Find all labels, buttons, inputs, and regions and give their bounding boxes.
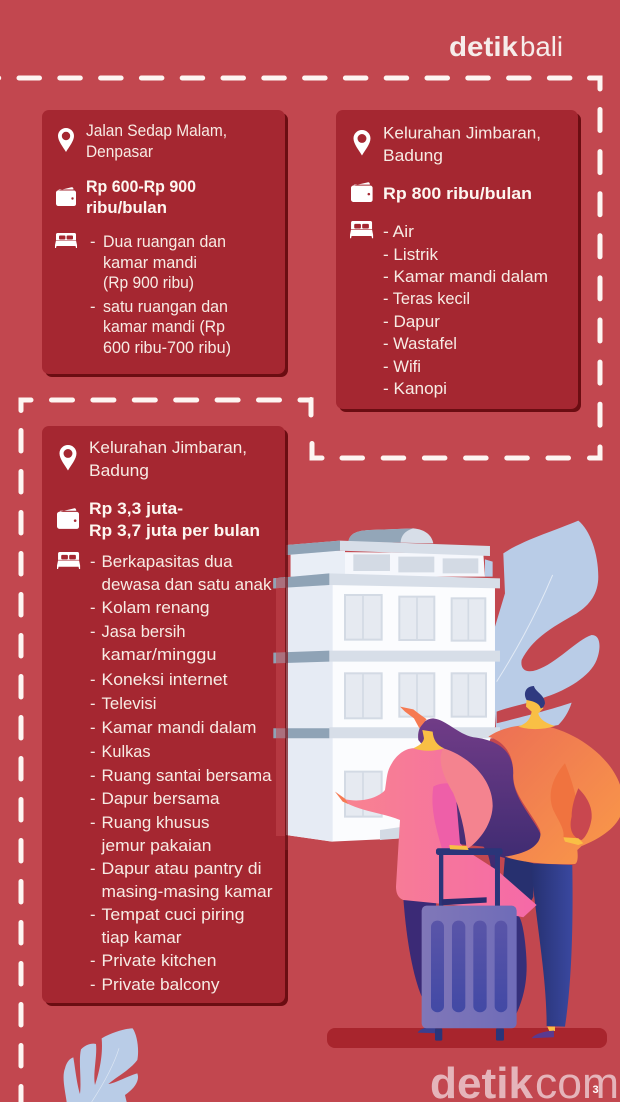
icon: wallet	[57, 508, 79, 529]
page number: 3	[592, 1084, 599, 1096]
dome	[348, 528, 433, 543]
facilities list: Koneksi internet	[102, 671, 228, 689]
card 3: text and icons	[57, 438, 273, 994]
facilities list: Ruang santai bersama	[102, 767, 272, 785]
price text	[89, 499, 260, 540]
icon: bed	[55, 233, 77, 248]
price text: Rp 800 ribu/bulan	[383, 184, 532, 203]
facilities list: -	[90, 623, 96, 641]
facilities list: kamar/minggu	[102, 646, 216, 664]
woman: hair	[418, 718, 543, 873]
facilities list: jemur pakaian	[100, 837, 212, 855]
location text: Kelurahan Jimbaran,	[89, 438, 247, 457]
facilities list: - Listrik	[383, 245, 438, 264]
facilities list: - Dapur	[383, 312, 440, 331]
woman: body	[335, 748, 537, 917]
facilities list: satu ruangan dan	[103, 298, 228, 316]
floor shadow	[327, 1028, 607, 1048]
facilities list: kamar mandi	[103, 254, 197, 272]
facilities list: tiap kamar	[102, 929, 182, 947]
woman: right arm	[441, 748, 493, 849]
location text	[89, 438, 247, 480]
facilities list: - Air	[383, 222, 414, 241]
icon: bed	[57, 552, 80, 569]
facilities list: 600 ribu-700 ribu)	[103, 339, 231, 357]
main body	[286, 585, 495, 842]
man: head and neck	[518, 686, 555, 729]
facilities list: Kulkas	[102, 743, 150, 761]
facilities list: -	[90, 952, 96, 970]
facilities list	[90, 553, 273, 994]
dashed frame: top right	[0, 78, 600, 458]
facilities list: -	[90, 767, 96, 785]
logo: detikbali: bali	[520, 31, 563, 62]
facilities list: -	[90, 790, 96, 808]
facilities list: -	[90, 976, 96, 994]
man: legs	[503, 857, 573, 1038]
suitcase	[422, 906, 517, 1041]
facilities list: dewasa dan satu anak	[102, 576, 272, 594]
facilities list: -	[90, 599, 96, 617]
logo: detikcom watermark	[430, 1059, 619, 1102]
icon: location pin	[60, 445, 76, 470]
facilities list: Dapur bersama	[102, 790, 220, 808]
dashed frame: lower left	[21, 400, 311, 1102]
icon: wallet	[56, 187, 76, 206]
location text: Kelurahan Jimbaran,	[383, 124, 541, 142]
location text	[383, 124, 541, 165]
facilities list: -	[90, 553, 96, 571]
man: torso	[488, 725, 620, 864]
facilities list: Kolam renang	[102, 599, 210, 617]
facilities list: Jasa bersih	[102, 623, 186, 641]
facilities list: -	[90, 743, 96, 761]
card 1: Jalan Sedap Malam	[42, 110, 288, 377]
facilities list: Televisi	[102, 695, 156, 713]
location text: Badung	[89, 461, 149, 480]
facilities list: - Kanopi	[383, 379, 447, 398]
card 3 shadow edge	[285, 530, 288, 850]
facilities list	[383, 222, 548, 398]
location text: Badung	[383, 146, 443, 165]
logo: detikbali	[449, 31, 563, 62]
facilities list	[90, 233, 231, 357]
facilities list: - Kamar mandi dalam	[383, 267, 548, 286]
facilities list: Private balcony	[102, 976, 220, 994]
woman: pointing arm	[400, 707, 427, 728]
facilities list: masing-masing kamar	[102, 883, 273, 901]
icon: bed	[350, 221, 373, 238]
icon: location pin	[354, 130, 370, 155]
facilities list: -	[90, 671, 96, 689]
icon: location pin	[58, 128, 74, 152]
facilities list: Kamar mandi dalam	[102, 719, 256, 737]
logo: detikbali: detik	[449, 31, 518, 62]
facilities list: kamar mandi (Rp	[103, 318, 225, 336]
top floor	[291, 552, 485, 577]
slabs	[273, 573, 500, 588]
small leaf decoration	[64, 1028, 138, 1102]
illustration: couple with suitcase	[335, 686, 620, 1041]
large leaf decoration	[490, 521, 599, 737]
price text: ribu/bulan	[86, 199, 167, 217]
facilities list: -	[90, 814, 96, 832]
card 3 dark edge over building	[276, 578, 285, 836]
illustration: apartment building	[273, 528, 500, 842]
price text: Rp 3,7 juta per bulan	[89, 521, 260, 540]
card 3 background	[42, 426, 288, 1006]
facilities list: -	[90, 719, 96, 737]
woman: hand	[335, 792, 348, 804]
woman: inner shading	[432, 783, 467, 853]
facilities list: - Teras kecil	[383, 289, 470, 308]
facilities list: -	[90, 233, 96, 251]
facilities list: Ruang khusus	[102, 814, 210, 832]
facilities list: -	[90, 298, 96, 316]
price text: Rp 3,3 juta-	[89, 499, 183, 518]
suitcase handle	[436, 845, 503, 907]
location text	[86, 122, 227, 161]
facilities list: -	[90, 860, 96, 878]
location text: Denpasar	[86, 143, 153, 161]
facilities list: Private kitchen	[102, 952, 216, 970]
facilities list: (Rp 900 ribu)	[103, 274, 194, 292]
price text: Rp 600-Rp 900	[86, 178, 196, 196]
roof slab	[287, 541, 490, 556]
facilities list: Dua ruangan dan	[103, 233, 226, 251]
facilities list: -	[90, 695, 96, 713]
facilities list: -	[90, 906, 96, 924]
facilities list: Berkapasitas dua	[102, 553, 233, 571]
facilities list: - Wifi	[383, 357, 421, 376]
woman: head and neck	[413, 730, 444, 751]
price text	[86, 178, 196, 217]
woman: lower legs	[403, 898, 527, 1033]
facilities list: - Wastafel	[383, 334, 457, 353]
facilities list: Tempat cuci piring	[102, 906, 244, 924]
icon: wallet	[351, 182, 373, 202]
windows	[345, 595, 486, 817]
card 2: Kelurahan Jimbaran	[336, 110, 581, 412]
location text: Jalan Sedap Malam,	[86, 122, 227, 140]
facilities list: Dapur atau pantry di	[102, 860, 262, 878]
